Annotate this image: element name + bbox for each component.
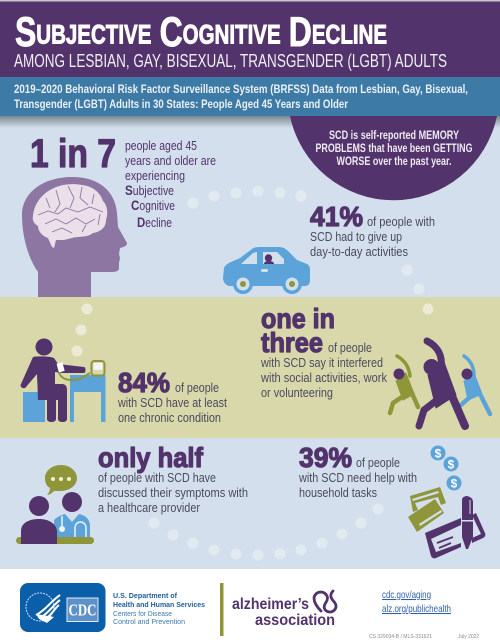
title text: ECLINE — [312, 20, 387, 50]
stat: only half: of people with SCD have — [98, 471, 216, 485]
stat: 41% — [310, 201, 435, 259]
text: web links: alz.org/publichealth — [382, 603, 451, 615]
logo: CDC: CDC — [68, 600, 96, 620]
stat: one in three: of people — [328, 341, 372, 355]
stat: 84% — [117, 367, 227, 425]
text: agency name: U.S. Department of — [113, 591, 177, 600]
title text: D — [289, 8, 312, 55]
panel: olive band — [0, 297, 500, 438]
stat: one in three: one in — [261, 303, 335, 334]
title text: S — [15, 8, 36, 55]
stat: 1 in 7: experiencing — [125, 169, 185, 183]
title text: C — [160, 8, 183, 55]
divider: olive rule — [220, 583, 224, 636]
band: data source — [0, 77, 500, 116]
stat: 41%: 41% — [310, 201, 363, 232]
stat: 84%: 84% — [118, 367, 170, 398]
text: agency name: Control and Prevention — [113, 617, 185, 626]
icon: seated person with blood pressure monitor — [21, 338, 106, 422]
logo: Alzheimer's Association — [232, 591, 336, 629]
stat: one in three — [260, 303, 388, 400]
logo: Alzheimer's Association: association — [255, 612, 335, 629]
panel: SCD definition circle: SCD is self-reported MEMORY — [329, 128, 459, 142]
stat: only half — [98, 442, 248, 515]
stat: one in three: with SCD say it interfered — [260, 356, 383, 370]
stat: 39%: with SCD need help with — [298, 471, 417, 485]
stat: one in three: or volunteering — [261, 386, 333, 400]
icon: coins, credit cards, check and pen — [408, 446, 485, 558]
stat: 39%: 39% — [299, 442, 352, 473]
text: publication info — [369, 634, 479, 640]
stat: 39% — [298, 442, 417, 500]
panel: SCD definition circle: WORSE over the past year. — [336, 154, 452, 168]
title text: UBJECTIVE — [36, 20, 157, 50]
panel: SCD definition circle — [290, 116, 497, 200]
text: agency name: Health and Human Services — [113, 600, 205, 609]
title text: OGNITIVE — [183, 20, 286, 50]
stat: one in three: three — [261, 327, 323, 358]
text: web links: cdc.gov/aging — [382, 589, 431, 601]
stat: 1 in 7: people aged 45 — [125, 139, 197, 153]
stat: 1 in 7: Decline — [137, 214, 172, 230]
stat: 84%: one chronic condition — [118, 411, 221, 425]
stat: 1 in 7 — [30, 132, 216, 230]
stat: 41%: of people with — [367, 215, 435, 229]
stat: 41%: day-to-day activities — [310, 245, 408, 259]
stat: one in three: with social activities, work — [260, 371, 388, 385]
stat: 84%: of people — [175, 381, 219, 395]
stat: 84%: with SCD have at least — [117, 396, 227, 410]
text: publication info: July 2022 — [458, 634, 479, 640]
band: data source: Transgender (LGBT) Adults in 30 States: People Aged 45 Years and Older — [14, 97, 348, 111]
stat: 1 in 7: Subjective — [125, 182, 174, 198]
blue figure — [461, 356, 490, 414]
icon: car — [223, 247, 310, 294]
text: web links — [382, 589, 451, 615]
stat: 1 in 7: Cognitive — [131, 197, 175, 213]
icon: coins, credit cards, check and pen: $ — [435, 446, 442, 460]
stat: only half: a healthcare provider — [98, 501, 200, 515]
icon: coins, credit cards, check and pen: $ — [451, 476, 458, 490]
stat: only half: discussed their symptoms with — [98, 486, 248, 500]
text: publication info: CS 329034-B / MLS-331621 — [369, 634, 432, 640]
stat: 1 in 7: 1 in 7 — [30, 132, 116, 176]
purple figure — [419, 341, 465, 426]
text: agency name: Centers for Disease — [113, 609, 172, 618]
dotted path — [72, 186, 434, 560]
text: agency name — [113, 591, 205, 626]
stat: only half: only half — [98, 442, 204, 473]
icon: coins, credit cards, check and pen: $ — [448, 458, 455, 472]
logo: CDC — [20, 583, 106, 632]
icon: people stretching — [390, 341, 490, 426]
head silhouette with brain — [22, 177, 127, 297]
icon: patient and doctor conversation — [16, 465, 94, 544]
header: title — [0, 0, 500, 77]
stat: 39%: household tasks — [299, 486, 377, 500]
stat: 1 in 7: years and older are — [125, 154, 216, 168]
stat: 41%: SCD had to give up — [310, 230, 402, 244]
stat: 39%: of people — [356, 456, 400, 470]
olive figure — [390, 356, 418, 413]
logo: Alzheimer's Association: alzheimer’s — [232, 596, 309, 613]
